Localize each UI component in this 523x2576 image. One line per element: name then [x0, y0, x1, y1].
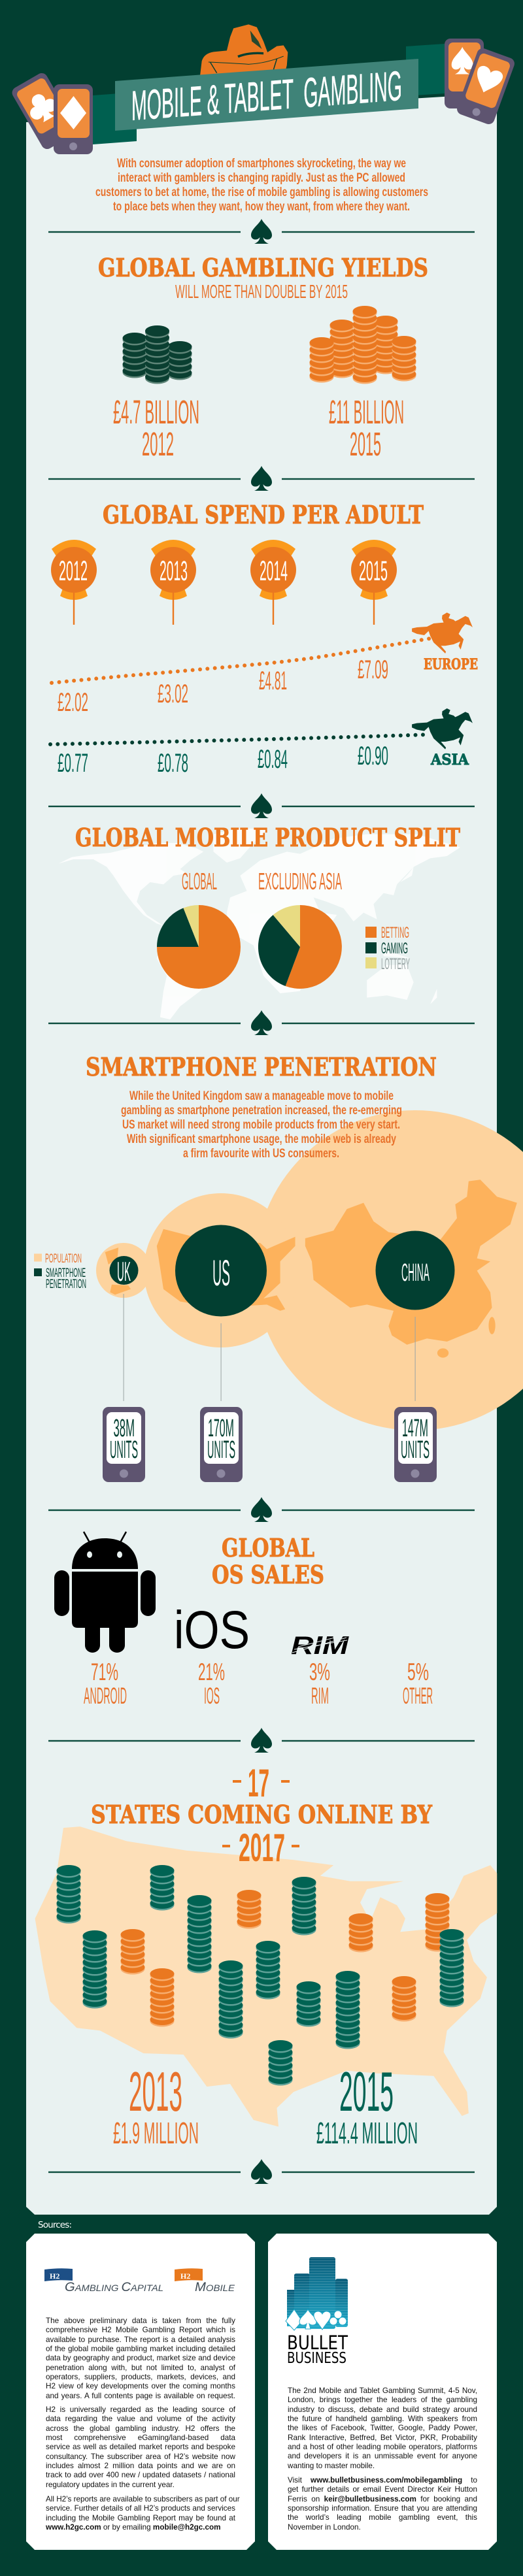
paragraph: US market will need strong mobile products from the very start.: [122, 1118, 400, 1132]
text: UNITS: [110, 1436, 138, 1464]
text block: H2 report description: available to purchase. The report is a detailed analysis: [46, 2336, 235, 2344]
values: Asia: £0.77: [58, 749, 88, 778]
card: Bullet Business: [268, 2234, 497, 2550]
text block: summit contact: sponsorship information. Ensure that you are attending: [288, 2504, 477, 2513]
icon: phone with spade: [445, 39, 484, 108]
text block: summit contact: the world’s leading mobile gambling event, this: [288, 2513, 477, 2522]
chip stacks on map: orange: [120, 1890, 450, 2027]
map: China: [305, 1180, 517, 1358]
text: RIM: [311, 1683, 329, 1709]
text block: H2 contact: including the Mobile Gambling Report may be found at: [46, 2514, 235, 2522]
text block: summit description: London, brings together the leaders of the gambling: [288, 2396, 477, 2404]
heading: states coming online by: STATES COMING ONLINE BY: [91, 1800, 432, 1830]
text: ANDROID: [84, 1683, 127, 1709]
circle: China smartphone penetration: CHINA: [401, 1259, 430, 1287]
heading: 2017: [222, 1826, 299, 1870]
chips: 2012: [123, 325, 192, 384]
stat: 2015 revenue: [316, 2061, 418, 2150]
circle: UK smartphone penetration: [110, 1256, 139, 1287]
dotted line: Europe: [52, 638, 430, 683]
icon: phone with club: [10, 71, 79, 151]
logo: H2 Mobile: MOBILE: [195, 2281, 235, 2294]
chip stack: east coast: [439, 1929, 464, 2007]
badge: 2015: [351, 540, 397, 625]
phone: UK units: 38M: [114, 1415, 135, 1442]
text: £11 BILLION: [329, 393, 404, 431]
heading: global gambling yields: GLOBAL GAMBLING YIELDS: [98, 254, 428, 283]
logo: H2 Gambling Capital: [44, 2268, 163, 2294]
intro text: With consumer adoption of smartphones skyrocketing, the way we: [117, 157, 406, 171]
pie chart: global: [157, 905, 241, 989]
text: PENETRATION: [46, 1278, 86, 1291]
text: £4.7 BILLION: [113, 393, 199, 431]
phone: UK units: [103, 1407, 145, 1482]
label: Asia: ASIA: [430, 751, 469, 768]
text block: summit contact: November in London.: [288, 2523, 361, 2532]
phone: US units: 170M: [208, 1415, 234, 1442]
values: Europe: £2.02: [58, 688, 88, 717]
text block: summit contact: Ferris on keir@bulletbusiness.com for booking and: [288, 2495, 477, 2503]
icon: Europe horse: [412, 612, 473, 653]
stat: RIM: [309, 1659, 330, 1709]
text block: H2 report description: of the global mobile gambling market including detailed: [46, 2345, 235, 2353]
text block: H2 data leadership: regulatory updates in the current year.: [46, 2481, 175, 2489]
text block: H2 data leadership: service as well as detailed market reports and bespoke: [46, 2443, 235, 2451]
text: UNITS: [401, 1436, 430, 1464]
badge: 2012: 2012: [59, 555, 88, 587]
stat: 2012 yield: 2012: [142, 425, 174, 463]
stat: 2015 yield: 2015: [350, 425, 381, 463]
badge: 2012: [51, 540, 97, 625]
text block: summit contact: get further details or email Event Director Keir Hutton: [288, 2485, 477, 2494]
pie chart: excluding Asia: [258, 905, 342, 989]
circle: US smartphone penetration: US: [212, 1252, 230, 1293]
logo: Bullet Business: BUSINESS: [287, 2350, 346, 2367]
text block: summit description: [288, 2386, 477, 2470]
icon: phone with heart: [456, 46, 516, 126]
badge: 2014: 2014: [260, 555, 288, 587]
text block: H2 data leadership: H2 is universally regarded as the leading source of: [46, 2405, 235, 2414]
text: UNITS: [207, 1436, 235, 1464]
heading: global OS sales: [212, 1534, 324, 1590]
text block: H2 data leadership: [46, 2405, 235, 2489]
circle: UK smartphone penetration: UK: [117, 1256, 131, 1287]
text block: H2 contact: All H2’s reports are available to subscribers as part of our: [46, 2495, 240, 2503]
text block: H2 report description: penetration along with, but not limited to, analyst of: [46, 2364, 235, 2372]
text: £7.09: [358, 655, 388, 684]
values: Asia: £0.78: [158, 749, 188, 778]
heading: 17: 17: [248, 1761, 269, 1805]
heading: global OS sales: GLOBAL: [222, 1534, 314, 1563]
map: United States: [35, 1826, 497, 2126]
text block: H2 report description: and years. A full contents page is available on request.: [46, 2392, 235, 2400]
text block: summit description: Rank Interactive, Betfred, Bet Victor, PKR, Probability: [288, 2434, 477, 2442]
text block: summit description: the future of handheld gambling. With speakers from: [288, 2415, 477, 2423]
card: H2: [26, 2234, 255, 2550]
logo: Bullet Business: BULLET: [287, 2332, 348, 2354]
logo: H2 Mobile: [175, 2268, 235, 2294]
values: Europe: £4.81: [259, 667, 287, 695]
badge: 2013: [150, 540, 196, 625]
stat: other: [403, 1659, 433, 1709]
world map backdrop: [58, 828, 460, 1019]
logo: H2 Gambling Capital: GAMBLING CAPITAL: [65, 2281, 163, 2294]
text block: H2 report description: operators, suppliers, products, markets, devices, and: [46, 2373, 235, 2381]
text block: summit contact: Visit www.bulletbusiness.com/mobilegambling to: [288, 2476, 477, 2485]
stat: iOS: 21%: [198, 1659, 225, 1685]
ribbon: left back fold: [93, 92, 137, 144]
badge: 2013: 2013: [160, 555, 188, 587]
map: US: [157, 1229, 295, 1311]
paragraph: [121, 1089, 402, 1161]
icon: Android robot: [54, 1532, 156, 1653]
text block: H2 data leadership: most comprehensive eGaming/land-based data: [46, 2434, 235, 2442]
text block: H2 contact: www.h2gc.com or by emailing mobile@h2gc.com: [46, 2523, 221, 2532]
population circle: UK: [96, 1243, 151, 1298]
text: £0.90: [358, 742, 388, 770]
text: £1.9 MILLION: [113, 2116, 199, 2150]
legend: population and penetration: POPULATION: [45, 1252, 82, 1266]
dotted line: Asia: [50, 735, 430, 744]
stat: Android: 71%: [91, 1659, 118, 1685]
intro text: [95, 157, 428, 214]
chips: 2015: [310, 306, 416, 384]
population circle: China: [255, 1110, 523, 1430]
logo: H2 Mobile: H2: [180, 2271, 190, 2281]
logo: Bullet Business: [286, 2257, 348, 2367]
text block: H2 contact: [46, 2495, 240, 2532]
chip stacks on map: teal: [56, 1865, 360, 2086]
values: Asia: [58, 742, 388, 778]
stat: Android: [84, 1659, 127, 1709]
icon: Asia horse: [412, 708, 473, 750]
text: BETTING: [381, 924, 409, 942]
stat: 2013 revenue: 2013: [129, 2061, 182, 2123]
heading: 2017: 2017: [239, 1826, 285, 1870]
stat: RIM: 3%: [309, 1659, 330, 1685]
circle: China smartphone penetration: [375, 1231, 455, 1310]
text block: summit description: wanting to master mobile.: [288, 2462, 375, 2470]
text block: H2 data leadership: track to add over 400 new / updated datasets / national: [46, 2471, 235, 2479]
text: EXCLUDING ASIA: [258, 868, 342, 895]
text block: H2 report description: comprehensive H2 Mobile Gambling Report which is: [46, 2326, 235, 2334]
map: UK: [105, 1247, 131, 1295]
text block: H2 report description: H2 view of key developments over the coming months: [46, 2382, 235, 2390]
text block: H2 data leadership: consultancy. The subscriber area of H2’s website now: [46, 2452, 235, 2461]
label: Europe: EUROPE: [424, 656, 478, 673]
phone: China units: 147M: [402, 1415, 428, 1442]
connector lines: [124, 1294, 416, 1401]
text block: H2 report description: The above preliminary data is taken from the fully: [46, 2317, 235, 2325]
phone: China units: [394, 1407, 437, 1482]
intro text: interact with gamblers is changing rapidly. Just as the PC allowed: [118, 171, 405, 185]
heading: smartphone penetration: SMARTPHONE PENETRATION: [86, 1053, 437, 1082]
badge: 2015: 2015: [359, 555, 388, 587]
text block: H2 report description: data by geography and product, market size and device: [46, 2354, 235, 2362]
heading: global spend per adult: GLOBAL SPEND PER ADULT: [103, 501, 424, 530]
heading: global OS sales: OS SALES: [212, 1560, 324, 1590]
text: OTHER: [403, 1683, 433, 1709]
text block: H2 report description: [46, 2317, 235, 2400]
values: Europe: £3.02: [158, 680, 188, 708]
stat: 2012 yield: [113, 393, 199, 463]
text block: summit description: industry to discuss, debate and build strategy around: [288, 2405, 477, 2414]
stat: iOS: [198, 1659, 225, 1709]
paragraph: While the United Kingdom saw a manageable move to mobile: [129, 1089, 394, 1103]
text block: summit description: The 2nd Mobile and Tablet Gambling Summit, 4-5 Nov,: [288, 2386, 477, 2395]
icon: phone with diamond: [54, 84, 93, 154]
sources label: Sources:: [38, 2220, 72, 2230]
subheading: WILL MORE THAN DOUBLE BY 2015: [175, 282, 348, 303]
ribbon: right back fold: [406, 44, 445, 96]
logo: iOS: iOS: [174, 1600, 250, 1660]
text: SMARTPHONE: [46, 1266, 86, 1280]
stat: 2015 revenue: 2015: [339, 2061, 394, 2123]
text: GAMING: [381, 940, 408, 957]
intro text: to place bets when they want, how they want, from where they want.: [113, 200, 410, 214]
icon: cowboy hat: [200, 24, 288, 75]
values: Europe: [58, 655, 388, 717]
text block: summit description: the likes of Facebook, Twitter, Google, Paddy Power,: [288, 2424, 477, 2432]
circle: US smartphone penetration: [175, 1225, 267, 1316]
stat: 2013 revenue: [113, 2061, 199, 2150]
text block: summit contact: [288, 2476, 477, 2532]
text block: H2 data leadership: across the global gambling industry. H2 offers the: [46, 2424, 235, 2433]
logo: H2 Gambling Capital: H2: [50, 2271, 59, 2281]
logo: RIM: RIM: [291, 1632, 350, 1660]
panel: light background: [26, 93, 497, 2215]
paragraph: gambling as smartphone penetration increased, the re-emerging: [121, 1104, 402, 1117]
phone: US units: [200, 1407, 243, 1482]
population circle: US: [144, 1193, 298, 1347]
stat: 2015 yield: [329, 393, 404, 463]
text: GLOBAL: [182, 868, 217, 895]
text block: H2 data leadership: includes almost 2 million data points and we are on: [46, 2462, 235, 2470]
text block: summit description: and developers it is an unmissable event for anyone: [288, 2452, 477, 2460]
text block: H2 contact: service. Further details of all H2’s products and services: [46, 2504, 235, 2513]
stat: iOS: IOS: [204, 1683, 220, 1709]
text block: H2 data leadership: data regarding the value and volume of the activity: [46, 2415, 235, 2423]
text: LOTTERY: [381, 955, 410, 973]
stat: other: 5%: [407, 1659, 429, 1685]
paragraph: a firm favourite with US consumers.: [183, 1147, 339, 1161]
title banner: [115, 59, 418, 131]
pie legend: [365, 924, 410, 973]
legend: population and penetration: [34, 1252, 86, 1291]
badge: 2014: [250, 540, 296, 625]
values: Asia: £0.84: [258, 745, 288, 774]
text block: summit description: and a host of other leading mobile operators, platforms: [288, 2443, 477, 2451]
paragraph: With significant smartphone usage, the mobile web is already: [127, 1132, 396, 1146]
